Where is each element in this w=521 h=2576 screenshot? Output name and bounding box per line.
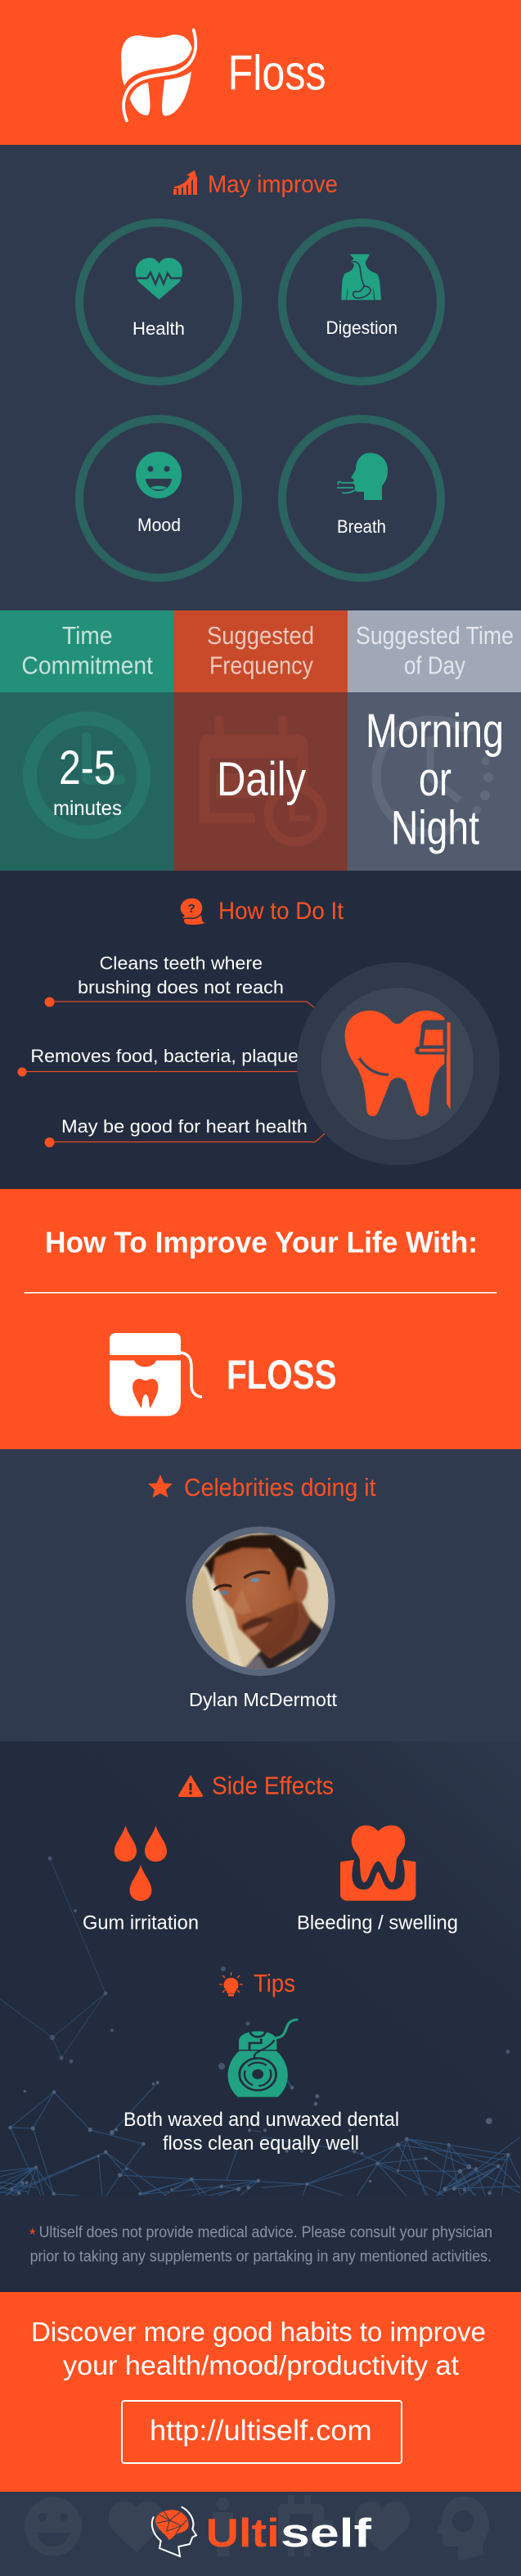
- disclaimer text: *: [29, 2227, 36, 2244]
- panel: side effects and tips: [0, 1741, 521, 2195]
- label: suggested time of day: [356, 621, 514, 680]
- icon: floss container: [228, 2020, 298, 2097]
- panel: disclaimer: [0, 2195, 521, 2292]
- label: Digestion: [326, 317, 397, 338]
- label: time commitment: [21, 621, 153, 680]
- icon: star: [148, 1475, 173, 1497]
- icon: head breathing out: [337, 453, 388, 500]
- icon: faint clock: [29, 718, 144, 832]
- wordmark: self: [281, 2511, 372, 2556]
- call to action text: your health/mood/productivity at: [63, 2350, 459, 2380]
- label: time commitment: Time: [62, 621, 113, 650]
- icon: brain in head: [152, 2506, 196, 2556]
- label: floss: FLOSS: [227, 1352, 337, 1398]
- tip text: [124, 2109, 399, 2155]
- logo: ultiself: [152, 2506, 372, 2556]
- panel: suggested time of day: [348, 610, 521, 871]
- name: Dylan McDermott: [189, 1689, 338, 1710]
- value: 2-5 minutes: minutes: [53, 797, 122, 820]
- value: 2-5 minutes: 2-5: [59, 741, 116, 795]
- panel: how to improve your life: [0, 1189, 521, 1449]
- icon: faint dotted clock: [376, 720, 493, 833]
- network background: [0, 1856, 520, 2195]
- benefit: removes food: Removes food, bacteria, plaque: [30, 1046, 299, 1066]
- benefit: heart health: [45, 1116, 338, 1147]
- heading: celebrities doing it: Celebrities doing it: [184, 1473, 376, 1502]
- icon: warning triangle: [178, 1775, 203, 1797]
- icon: faint calendar with clock: [204, 720, 322, 842]
- faint footer icons: [25, 2495, 489, 2560]
- panel: how to do it: [0, 871, 521, 1189]
- icon: digestive system: [341, 254, 381, 300]
- icon: question bubbles: ?: [188, 902, 195, 916]
- url button: [122, 2401, 402, 2463]
- heading: tips: Tips: [254, 1969, 295, 1997]
- panel: suggested frequency: [173, 610, 348, 871]
- wordmark: [206, 2511, 372, 2556]
- label: gum irritation: Gum irritation: [83, 1912, 199, 1934]
- benefit: removes food: [18, 1046, 316, 1077]
- icon: light bulb: [219, 1972, 243, 1997]
- label: suggested frequency: Frequency: [209, 651, 313, 680]
- benefit: heart health: May be good for heart health: [61, 1116, 308, 1137]
- icon: floss box: [110, 1333, 202, 1416]
- panel: may improve: [0, 145, 521, 610]
- label: suggested frequency: [207, 621, 314, 680]
- value: daily: Daily: [217, 753, 306, 806]
- disclaimer text: Ultiself does not provide medical advice. Please consult your physician: [39, 2224, 492, 2241]
- circle: breath: [282, 419, 441, 578]
- disclaimer text: prior to taking any supplements or partaking in any mentioned activities.: [30, 2249, 492, 2265]
- benefit: cleans teeth: brushing does not reach: [78, 977, 284, 998]
- panel: celebrities: [148, 1475, 376, 1710]
- label: suggested frequency: Suggested: [207, 621, 314, 650]
- tip text: Both waxed and unwaxed dental: [124, 2109, 399, 2131]
- call to action text: Discover more good habits to improve: [31, 2317, 486, 2347]
- title: Floss: [228, 46, 326, 100]
- heading: how to do it: How to Do It: [218, 898, 344, 925]
- call to action text: [31, 2317, 486, 2380]
- label: Breath: [337, 516, 386, 537]
- value: morning or night: Night: [391, 802, 479, 854]
- disclaimer text: [29, 2224, 492, 2265]
- benefit: cleans teeth: [45, 952, 324, 1016]
- heading: how to improve: How To Improve Your Life With:: [45, 1226, 478, 1259]
- icon: tooth in swollen gum: [340, 1826, 415, 1901]
- wordmark: Ulti: [206, 2511, 280, 2556]
- label: suggested time of day: of Day: [404, 651, 465, 680]
- panel: call to action: [0, 2292, 521, 2492]
- value: morning or night: [366, 705, 504, 854]
- icon: tooth with floss pick: [297, 962, 500, 1165]
- icon: smiley: [136, 452, 182, 498]
- benefit: cleans teeth: Cleans teeth where: [100, 952, 263, 973]
- circle: mood: [79, 419, 238, 578]
- heading: may improve: May improve: [208, 171, 338, 198]
- panel: footer: [0, 2492, 521, 2576]
- value: morning or night: or: [419, 753, 451, 806]
- circle: health: [79, 223, 238, 381]
- icon: blood drops: [115, 1826, 167, 1901]
- icon: tooth with floss: [121, 30, 195, 120]
- icon: question bubbles: [180, 898, 205, 925]
- heading: side effects: Side Effects: [212, 1771, 334, 1800]
- label: bleeding swelling: Bleeding / swelling: [297, 1912, 458, 1934]
- panel: time commitment: [0, 610, 173, 871]
- panel: header: [0, 0, 521, 145]
- label: Health: [132, 318, 185, 339]
- circle: digestion: [282, 223, 441, 381]
- tip text: floss clean equally well: [163, 2132, 359, 2155]
- label: time commitment: Commitment: [21, 651, 153, 680]
- value: 2-5 minutes: [53, 741, 122, 820]
- icon: heart: [134, 258, 184, 299]
- photo: dylan mcdermott: [186, 1526, 335, 1676]
- label: Mood: [137, 515, 181, 535]
- url button: http://ultiself.com: [150, 2415, 372, 2447]
- icon: rising chart: [173, 170, 197, 195]
